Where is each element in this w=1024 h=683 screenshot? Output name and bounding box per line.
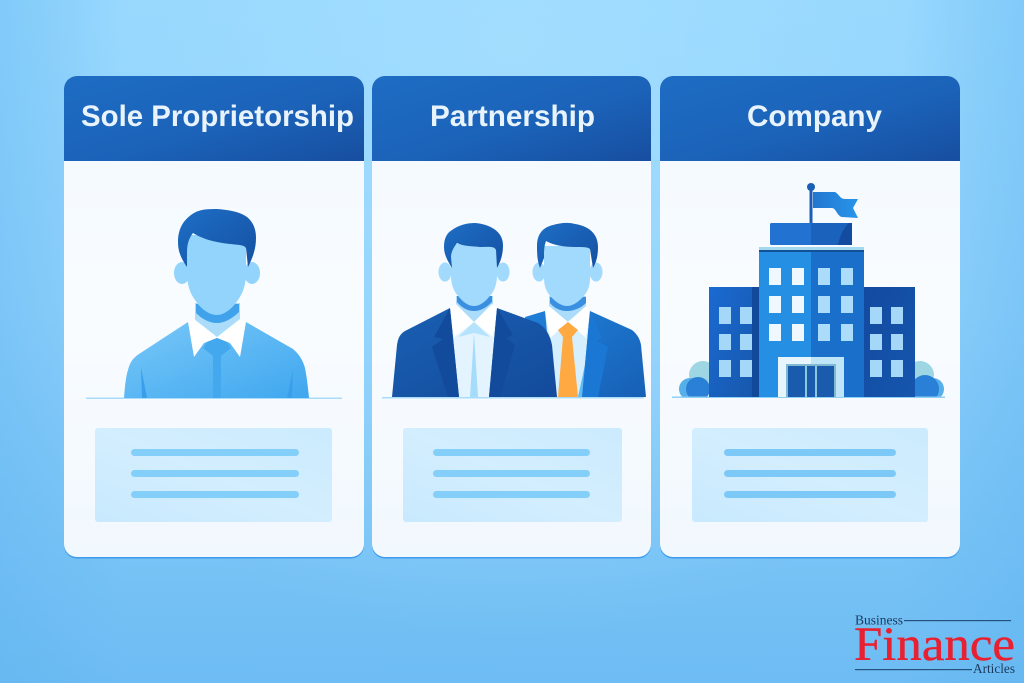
header band — [372, 76, 651, 161]
icon: office building with flag — [672, 183, 945, 403]
panel: company — [660, 76, 960, 558]
flag — [807, 183, 858, 224]
card body — [64, 76, 364, 558]
ground line — [672, 396, 945, 398]
partner: right man — [525, 223, 646, 397]
header band — [660, 76, 960, 161]
text placeholder panel — [403, 428, 622, 522]
entrance — [778, 357, 844, 397]
panel: partnership — [372, 76, 651, 558]
left wing — [709, 287, 759, 397]
icon: two business partners — [382, 223, 646, 398]
header band — [64, 76, 364, 161]
right wing — [863, 287, 915, 397]
icon: single person — [86, 209, 342, 399]
heading: Sole Proprietorship — [81, 100, 354, 133]
logo: Business Finance Articles: Articles — [973, 661, 1015, 676]
text placeholder panel — [95, 428, 332, 522]
text placeholder panel — [692, 428, 928, 522]
heading: Company — [747, 100, 882, 133]
panel: sole proprietorship — [64, 76, 364, 558]
card body — [660, 76, 960, 558]
bushes — [679, 361, 944, 396]
logo: Business Finance Articles: Business — [855, 612, 903, 628]
heading: Partnership — [430, 100, 595, 133]
card body — [372, 76, 651, 558]
partner: left man — [392, 223, 557, 397]
main tower — [759, 252, 864, 397]
logo: Business Finance Articles: Finance — [854, 618, 1015, 671]
roof block — [759, 223, 864, 252]
